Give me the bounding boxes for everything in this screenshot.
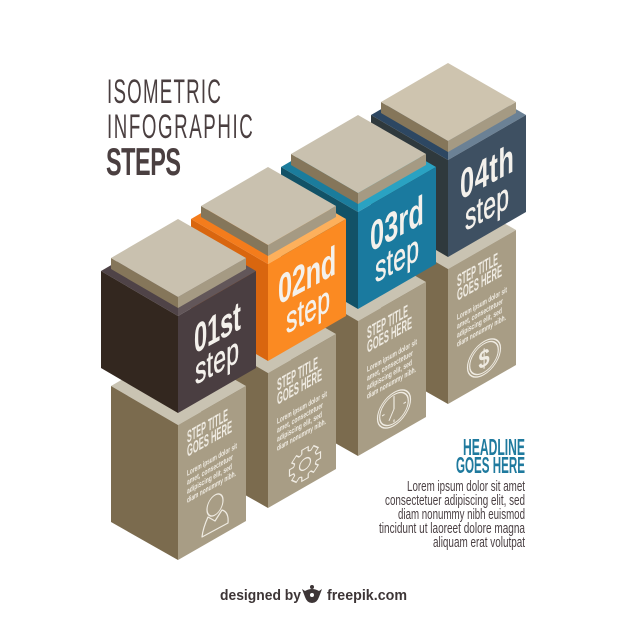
- icon: dollar coin: [468, 332, 500, 384]
- step 4 text: [457, 248, 507, 349]
- step 1 label: step: [195, 328, 239, 393]
- step 1 cap: [111, 219, 246, 308]
- step 2 text: Lorem ipsum dolor sit: [277, 389, 327, 426]
- step 4 lower panel: [381, 191, 516, 404]
- headline: HEADLINE: [463, 434, 525, 460]
- step 1 lower panel: [111, 347, 246, 560]
- description text: tincidunt ut laoreet dolore magna: [379, 520, 525, 537]
- step 4 cube: [371, 70, 526, 257]
- description text: Lorem ipsum dolor sit amet: [407, 478, 526, 495]
- title: STEPS: [106, 140, 181, 183]
- text: GOES HERE: [457, 260, 502, 305]
- step 3 label: 03rd: [370, 186, 424, 261]
- step 2 cap: [201, 167, 336, 256]
- icon: gear: [290, 440, 320, 488]
- step 4 text: adipiscing elit, sed: [457, 305, 502, 340]
- text: GOES HERE: [367, 312, 412, 357]
- step 2 text: amet, consectetuer: [277, 400, 323, 435]
- step 3 label: step: [375, 226, 419, 291]
- text: GOES HERE: [187, 416, 232, 461]
- step 1 label: 01st: [194, 293, 241, 363]
- title: [106, 72, 253, 183]
- step 3 text: STEP TITLE: [367, 300, 408, 343]
- step 2 text: STEP TITLE: [277, 352, 318, 395]
- description text: [379, 478, 526, 551]
- step 4 cap: [381, 63, 516, 152]
- step 2 text: [277, 352, 327, 453]
- step 2 lower panel: [201, 295, 336, 508]
- title: ISOMETRIC: [107, 72, 221, 110]
- step 2 label: 02nd: [278, 237, 336, 314]
- step 2 text: diam nonummy nibh.: [277, 416, 326, 453]
- step 1 text: diam nonummy nibh.: [187, 468, 236, 505]
- step 4 label: step: [465, 174, 509, 239]
- step 3 block: [281, 115, 436, 456]
- step 1 text: STEP TITLE: [187, 404, 228, 447]
- step 2 label: step: [286, 277, 330, 342]
- footer credit: [220, 585, 407, 604]
- icon: clock: [378, 383, 410, 435]
- icon: person: [202, 490, 228, 537]
- step 1 cube: [101, 226, 256, 413]
- step 4 text: diam nonummy nibh.: [457, 312, 506, 349]
- title: INFOGRAPHIC: [107, 107, 253, 145]
- footer credit: freepik.com: [327, 587, 407, 604]
- step 1 text: adipiscing elit, sed: [187, 461, 232, 496]
- icon: dollar coin: $: [478, 342, 490, 376]
- description text: diam nonummy nibh euismod: [398, 506, 525, 523]
- step 1 block: [101, 219, 256, 560]
- step 3 cube: [281, 122, 436, 309]
- headline: GOES HERE: [456, 452, 525, 478]
- step 3 lower panel: [291, 243, 426, 456]
- step 2 text: adipiscing elit, sed: [277, 409, 322, 444]
- step 3 cap: [291, 115, 426, 204]
- step 3 text: amet, consectetuer: [367, 348, 413, 383]
- description text: consectetuer adipiscing elit, sed: [385, 492, 525, 509]
- step 3 text: Lorem ipsum dolor sit: [367, 337, 417, 374]
- icon: freepik logo: [302, 585, 322, 603]
- step 4 text: Lorem ipsum dolor sit: [457, 285, 507, 322]
- step 4 block: [371, 63, 526, 404]
- step 3 text: diam nonummy nibh.: [367, 364, 416, 401]
- step 2 cube: [191, 174, 346, 361]
- step 3 text: [367, 300, 417, 401]
- description text: aliquam erat volutpat: [433, 534, 526, 551]
- headline: [456, 434, 525, 478]
- step 3 text: adipiscing elit, sed: [367, 357, 412, 392]
- step 4 label: 04th: [460, 134, 514, 209]
- step 1 text: [187, 404, 237, 505]
- step 2 block: [191, 167, 346, 508]
- step 1 text: Lorem ipsum dolor sit: [187, 441, 237, 478]
- step 4 text: amet, consectetuer: [457, 296, 503, 331]
- step 4 text: STEP TITLE: [457, 248, 498, 291]
- step 1 label: [194, 293, 241, 393]
- text: GOES HERE: [277, 364, 322, 409]
- footer credit: designed by: [220, 587, 302, 604]
- step 1 text: amet, consectetuer: [187, 452, 233, 487]
